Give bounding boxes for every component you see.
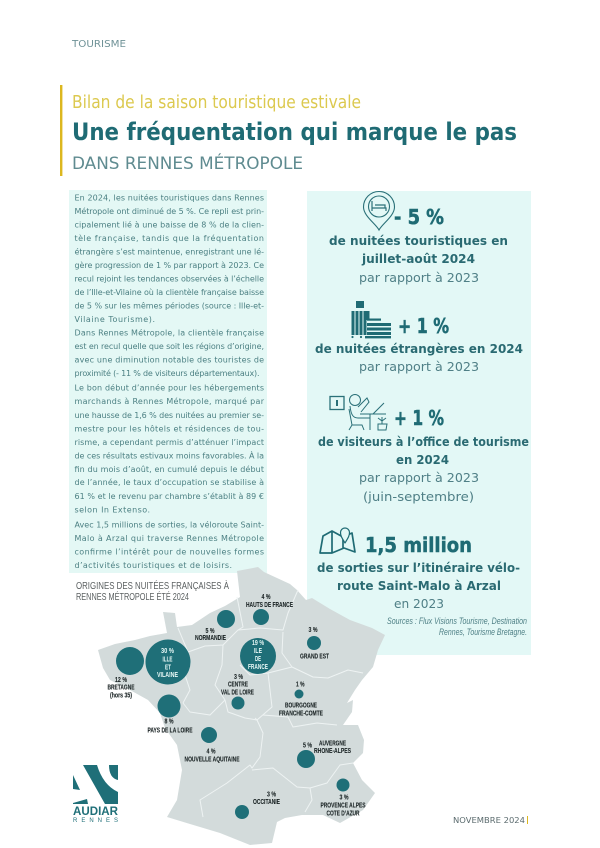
panel: article text: étrangère s’est maintenue, enregistrant une lé- xyxy=(74,247,264,257)
figure: plus 1 percent tourist office: de visiteurs à l’office de tourisme xyxy=(318,434,529,449)
panel: article text: Vilaine Tourisme). xyxy=(74,315,155,324)
region labels: ILE xyxy=(254,648,262,655)
region labels: 5 % xyxy=(206,626,215,635)
panel: article text: 61 % et le revenu par chambre s’établit à 89 € xyxy=(74,491,264,501)
panel: article text: avec une diminution notable des touristes de xyxy=(74,356,264,365)
region labels: 3 % xyxy=(340,792,349,802)
panel: article text: Métropole ont diminué de 5 %. Ce repli est prin- xyxy=(74,206,264,216)
figure: minus 5 percent xyxy=(329,205,508,285)
figure: plus 1 percent foreign stays: de nuitées étrangères en 2024 xyxy=(315,341,523,356)
region labels: GRAND EST xyxy=(300,652,329,660)
panel: article text: proximité (- 11 % de visiteurs départementaux). xyxy=(74,368,260,378)
panel: article text: marchands à Rennes Métropole, marqué par xyxy=(74,396,265,406)
region labels: 4 % xyxy=(262,592,271,601)
panel: article text: risme, a cependant permis d’atténuer l’impact xyxy=(74,437,264,447)
region labels: PROVENCE ALPES xyxy=(320,800,366,810)
figure: plus 1 percent tourist office xyxy=(318,406,529,504)
panel: article text: tèle française, tandis que la fréquentation xyxy=(74,233,264,243)
region labels: OCCITANIE xyxy=(253,797,280,806)
logo: Audiar Rennes: AUDIAR xyxy=(73,804,118,818)
map title: ORIGINES DES NUITÉES FRANÇAISES À xyxy=(76,579,229,592)
footer date: NOVEMBRE 2024 xyxy=(453,816,525,825)
panel: article text: une hausse de 1,6 % des nuitées au premier se- xyxy=(74,410,264,420)
region labels: AUVERGNE xyxy=(319,738,346,748)
logo: Audiar Rennes xyxy=(73,765,118,824)
region labels: 19 % xyxy=(252,640,265,647)
figure: plus 1 percent foreign stays: + 1 % xyxy=(398,314,449,338)
figure: plus 1 percent tourist office: en 2024 xyxy=(396,452,449,467)
region labels: 12 % xyxy=(115,675,127,684)
panel: article text: mestre pour les hôtels et résidences de tou- xyxy=(74,423,264,433)
panel: article text: En 2024, les nuitées touristiques dans Rennes xyxy=(74,193,264,203)
sources note: Sources : Flux Visions Tourisme, Destination xyxy=(387,616,527,627)
figure: minus 5 percent: juillet-août 2024 xyxy=(361,251,475,266)
panel: article text: de l’année, le taux d’occupation se stabilise à xyxy=(74,477,264,487)
region labels: 3 % xyxy=(234,672,243,681)
sources note xyxy=(387,616,527,638)
region labels: ILLE xyxy=(162,656,173,664)
panel: article text: de 5 % sur les mêmes périodes (source : Ille-et- xyxy=(74,301,264,311)
region labels: VAL DE LOIRE xyxy=(221,688,254,696)
panel: article text: cipalement lié à une baisse de 8 % de la clien- xyxy=(74,220,264,230)
title block: Une fréquentation qui marque le pas xyxy=(72,118,517,146)
panel: article text: d’activités touristiques et de loisirs. xyxy=(74,560,232,570)
panel: article text: selon In Extenso. xyxy=(74,505,150,514)
logo: Audiar Rennes: RENNES xyxy=(73,818,118,824)
figure: 1.5 million outings: en 2023 xyxy=(394,596,444,611)
region labels: DE xyxy=(255,656,261,663)
panel: article text: recul rejoint les tendances observées à l’échelle xyxy=(74,274,264,284)
figure: 1.5 million outings: 1,5 million xyxy=(365,533,472,557)
figure: plus 1 percent foreign stays xyxy=(315,314,523,374)
region labels: HAUTS DE FRANCE xyxy=(246,600,293,609)
figure: plus 1 percent foreign stays: par rapport à 2023 xyxy=(359,359,479,374)
panel: article text: fin du mois d’août, en cumulé depuis le début xyxy=(74,464,264,474)
region labels: 4 % xyxy=(206,746,216,756)
panel: article text: est en recul quelle que soit les régions d’origine, xyxy=(74,341,264,351)
figure: plus 1 percent tourist office: + 1 % xyxy=(394,406,444,430)
region labels: RHONE-ALPES xyxy=(314,746,351,755)
icon: folded map with pin xyxy=(320,528,355,553)
panel: key figures xyxy=(307,191,531,655)
panel: article text: Malo à Arzal qui traverse Rennes Métropole xyxy=(74,533,264,543)
map title xyxy=(76,579,229,603)
panel: article text: de ces résultats estivaux moins favorables. À la xyxy=(74,449,264,460)
section label: TOURISME xyxy=(71,39,126,50)
sources note: Rennes, Tourisme Bretagne. xyxy=(439,627,527,638)
figure: minus 5 percent: par rapport à 2023 xyxy=(359,270,479,285)
panel: article text: Avec 1,5 millions de sorties, la véloroute Saint- xyxy=(74,520,264,530)
region labels: PAYS DE LA LOIRE xyxy=(148,726,193,734)
region labels: NORMANDIE xyxy=(195,633,226,642)
region labels: CENTRE xyxy=(228,680,248,688)
figure: minus 5 percent: - 5 % xyxy=(394,205,444,229)
region labels: VILAINE xyxy=(157,672,178,679)
region labels: 5 % xyxy=(303,740,312,750)
region borders xyxy=(178,590,363,817)
title block xyxy=(60,85,517,176)
map: origins of French overnight stays xyxy=(76,567,385,845)
region labels xyxy=(108,592,366,818)
region labels: 30 % xyxy=(161,648,175,655)
region labels: ET xyxy=(165,664,171,672)
figure: 1.5 million outings: route Saint-Malo à Arzal xyxy=(337,578,501,593)
panel: article text: Dans Rennes Métropole, la clientèle française xyxy=(74,328,264,338)
icon: luggage xyxy=(351,301,391,338)
figure: 1.5 million outings: de sorties sur l’itinéraire vélo- xyxy=(317,560,520,575)
panel: article text xyxy=(69,190,267,573)
region labels: 1 % xyxy=(296,680,305,688)
panel: article text: Le bon début d’année pour les hébergements xyxy=(74,383,264,393)
icon: hotel location pin xyxy=(364,192,394,230)
figure: minus 5 percent: de nuitées touristiques en xyxy=(329,233,508,248)
panel: article text: de l’Ille-et-Vilaine où la clientèle française baisse xyxy=(74,287,264,297)
region labels: COTE D’AZUR xyxy=(326,808,360,818)
region labels: FRANCE xyxy=(248,664,268,671)
figure: 1.5 million outings xyxy=(317,533,520,611)
France outline xyxy=(98,567,385,845)
icon: tourist office visitor xyxy=(330,394,387,430)
bubbles xyxy=(116,609,350,819)
region labels: FRANCHE-COMTE xyxy=(279,708,323,718)
region labels: BRETAGNE xyxy=(108,682,135,692)
panel: article text: confirme l’intérêt pour de nouvelles formes xyxy=(74,547,264,557)
region labels: (hors 35) xyxy=(110,690,132,700)
panel: article text: gère progression de 1 % par rapport à 2023. Ce xyxy=(74,260,264,270)
region labels: 8 % xyxy=(164,716,174,726)
region labels: 3 % xyxy=(308,625,318,634)
figure: plus 1 percent tourist office: par rapport à 2023 xyxy=(359,470,479,485)
region labels: 3 % xyxy=(267,790,276,798)
region labels: BOURGOGNE xyxy=(285,700,317,710)
title block: Bilan de la saison touristique estivale xyxy=(72,92,361,113)
title block: DANS RENNES MÉTROPOLE xyxy=(72,154,303,173)
map title: RENNES MÉTROPOLE ÉTÉ 2024 xyxy=(76,590,189,603)
region labels: NOUVELLE AQUITAINE xyxy=(184,754,240,764)
figure: plus 1 percent tourist office: (juin-septembre) xyxy=(363,489,474,504)
